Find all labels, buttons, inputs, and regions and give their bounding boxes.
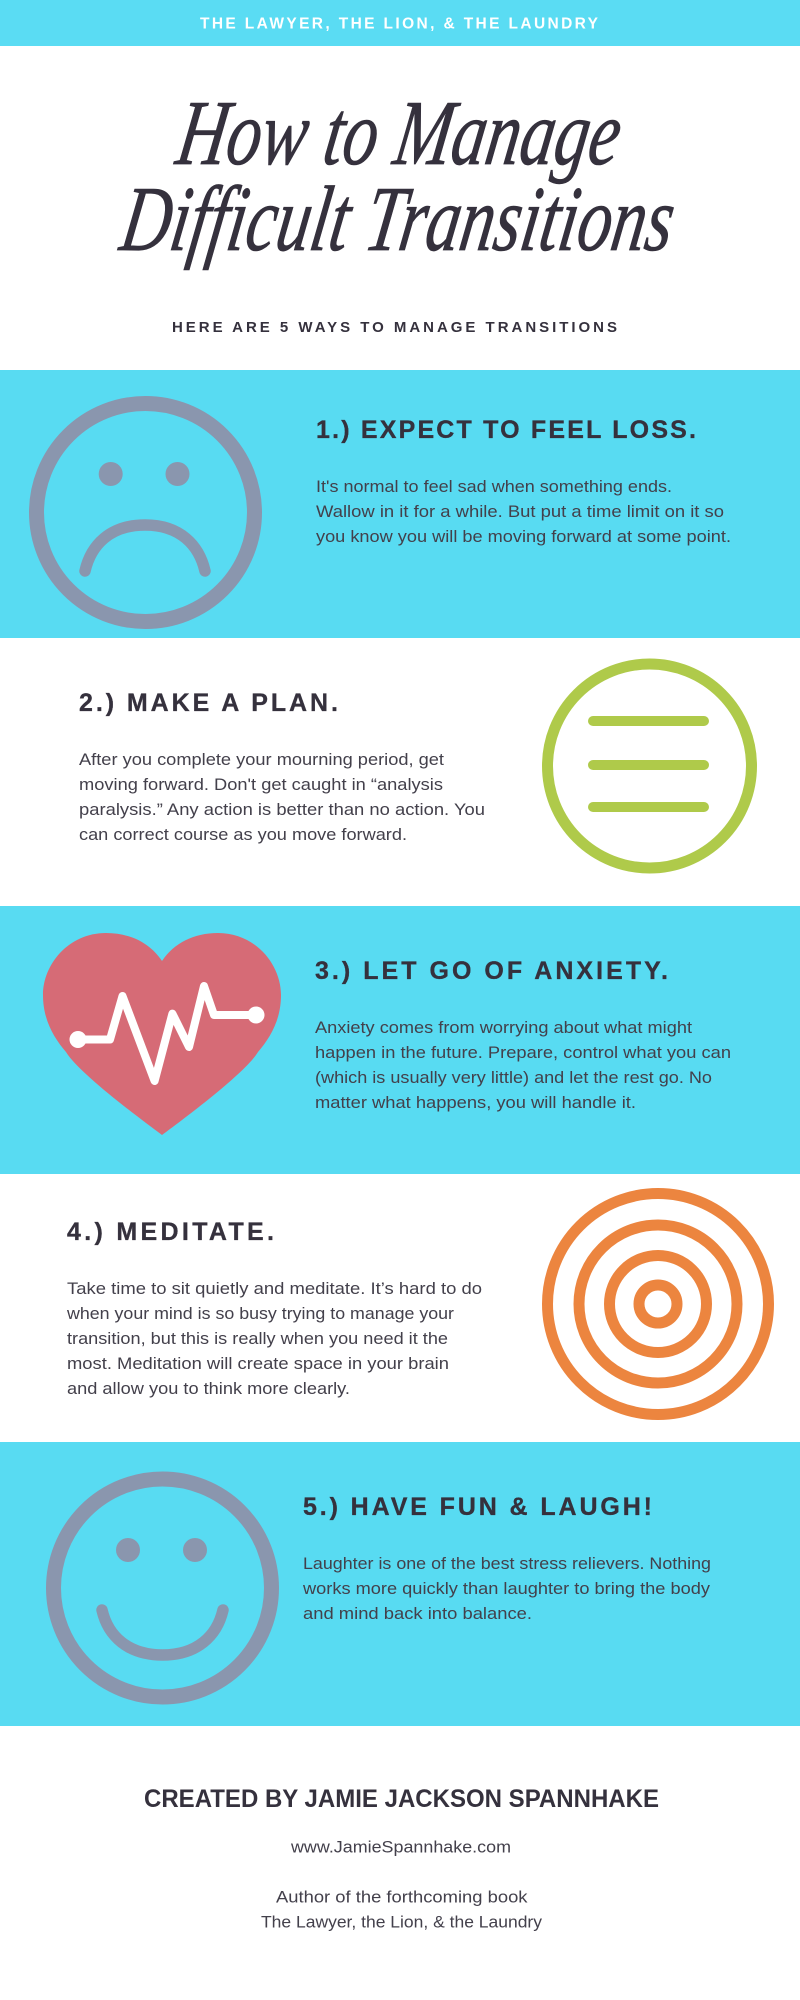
- heading 2: 2.) MAKE A PLAN.: [79, 689, 338, 717]
- text block 2: paralysis.” Any action is better than no action. You: [79, 800, 485, 819]
- text block 5: and mind back into balance.: [303, 1604, 532, 1623]
- text block 2: can correct course as you move forward.: [79, 825, 407, 844]
- title: [113, 83, 682, 271]
- text block 1: It's normal to feel sad when something ends.: [316, 477, 672, 496]
- panel: 3 let go of anxiety: [0, 906, 800, 1174]
- top banner: THE LAWYER, THE LION, & THE LAUNDRY: [200, 16, 599, 32]
- heading 3: 3.) LET GO OF ANXIETY.: [315, 957, 668, 985]
- panel: 5 have fun and laugh: [0, 1442, 800, 1726]
- text block 5: works more quickly than laughter to bring the body: [302, 1579, 711, 1598]
- text block 3: Anxiety comes from worrying about what might: [315, 1018, 692, 1037]
- heading 4: 4.) MEDITATE.: [67, 1218, 274, 1246]
- top banner: [0, 0, 800, 46]
- text block 3: happen in the future. Prepare, control what you can: [315, 1043, 731, 1062]
- text block 1: you know you will be moving forward at some point.: [316, 527, 731, 546]
- panel: 4 meditate: [66, 1194, 768, 1414]
- panel: 1 expect to feel loss: [0, 370, 800, 638]
- panel: 2 make a plan: [79, 664, 752, 868]
- creator name: CREATED BY JAMIE JACKSON SPANNHAKE: [144, 1785, 659, 1813]
- author line: Author of the forthcoming book: [276, 1888, 528, 1906]
- heading 1: 1.) EXPECT TO FEEL LOSS.: [316, 416, 696, 444]
- text block 2: moving forward. Don't get caught in “analysis: [79, 775, 443, 794]
- text block 4: [66, 1279, 482, 1398]
- text block 4: when your mind is so busy trying to manage your: [66, 1304, 454, 1323]
- text block 4: Take time to sit quietly and meditate. It’s hard to do: [67, 1279, 482, 1298]
- text block 3: matter what happens, you will handle it.: [315, 1093, 636, 1112]
- text block 1: Wallow in it for a while. But put a time limit on it so: [316, 502, 724, 521]
- text block 4: and allow you to think more clearly.: [67, 1379, 350, 1398]
- website: www.JamieSpannhake.com: [290, 1838, 511, 1856]
- text block 2: [79, 750, 485, 844]
- subtitle: HERE ARE 5 WAYS TO MANAGE TRANSITIONS: [172, 319, 617, 336]
- icon: sad face: [36, 404, 254, 622]
- text block 3: [315, 1018, 731, 1112]
- heading 5: 5.) HAVE FUN & LAUGH!: [303, 1493, 652, 1521]
- icon: list in circle: [548, 664, 752, 868]
- footer credits: [144, 1785, 659, 1932]
- text block 5: [302, 1554, 711, 1623]
- text block 4: transition, but this is really when you need it the: [67, 1329, 448, 1348]
- book title: The Lawyer, the Lion, & the Laundry: [261, 1912, 543, 1932]
- text block 3: (which is usually very little) and let the rest go. No: [315, 1068, 712, 1087]
- text block 4: most. Meditation will create space in your brain: [67, 1354, 449, 1373]
- icon: target rings: [548, 1194, 768, 1414]
- text block 2: After you complete your mourning period, get: [79, 750, 444, 769]
- icon: happy face: [54, 1479, 272, 1697]
- title: How to Manage: [170, 83, 629, 185]
- text block 1: [316, 477, 731, 546]
- text block 5: Laughter is one of the best stress relievers. Nothing: [303, 1554, 711, 1573]
- icon: heart with pulse: [43, 933, 281, 1135]
